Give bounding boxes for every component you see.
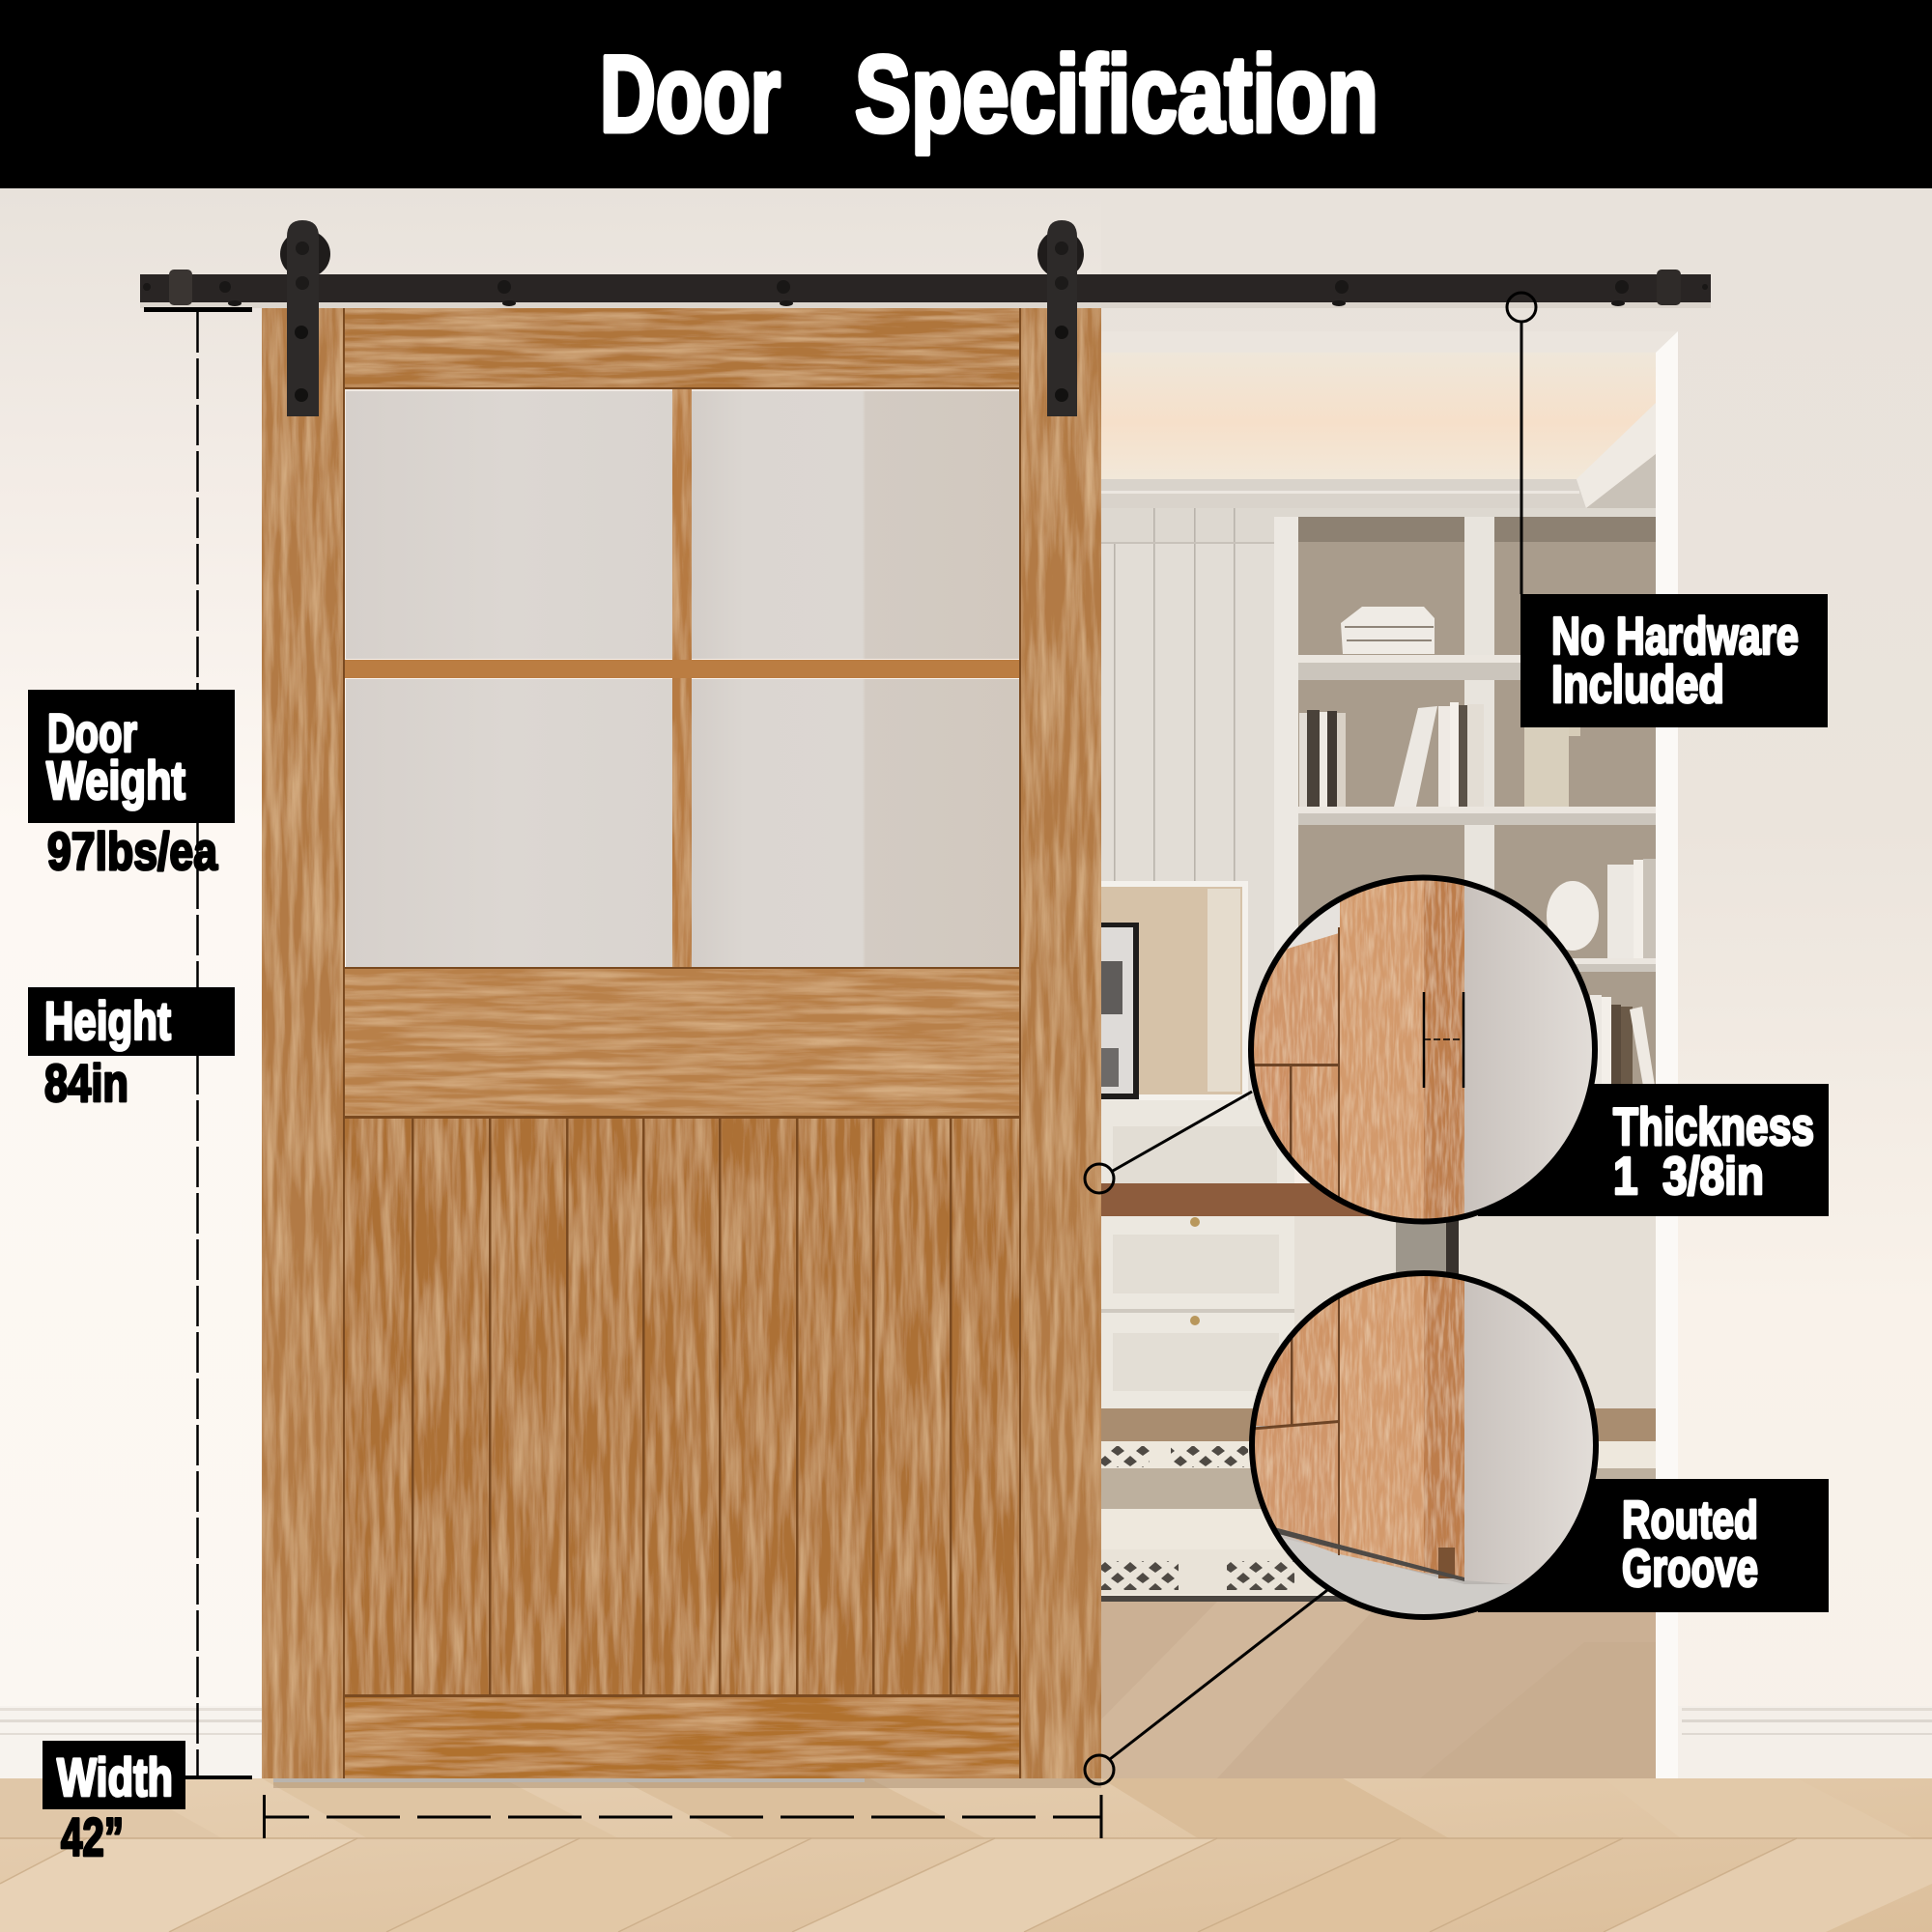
wood desk top <box>1101 1183 1391 1216</box>
callout: routed groove: Groove <box>1622 1538 1758 1598</box>
label: door weight: Weight <box>46 750 185 810</box>
sliding rail hardware <box>140 220 1711 416</box>
skirting board left <box>0 1706 262 1778</box>
left hanger strap and wheel <box>280 220 330 416</box>
callout: routed groove <box>1085 1479 1829 1784</box>
value: 42 inches: 42” <box>61 1806 124 1867</box>
books and decor on shelves <box>1299 607 1656 1116</box>
lens ring <box>1251 877 1595 1221</box>
value: 97lbs/ea: 97lbs/ea <box>47 821 217 881</box>
door opening soffit and jamb <box>1101 331 1678 1778</box>
black track rail <box>140 274 1711 302</box>
crown moulding <box>1101 403 1656 508</box>
title text: Door <box>600 34 781 155</box>
callout: no hardware included: Included <box>1551 654 1724 714</box>
value: 84in: 84in <box>44 1053 128 1113</box>
glass muntin bar <box>344 660 1020 678</box>
label: width: Width <box>57 1747 173 1807</box>
interior floor and rug <box>1101 1408 1656 1778</box>
framed art and photo <box>1101 881 1248 1100</box>
cabinet above desk <box>1101 1100 1294 1183</box>
door rails <box>344 308 1020 1778</box>
ceiling with warm cove light <box>1101 353 1656 479</box>
callout: thickness: Thickness <box>1613 1096 1814 1156</box>
callout: routed groove: Routed <box>1622 1490 1758 1549</box>
barn door <box>262 308 1101 1778</box>
drawers and cream cabinets <box>1101 1216 1656 1408</box>
title text <box>600 34 1378 155</box>
label: door weight: Door <box>47 702 137 763</box>
skirting board right <box>1678 1706 1932 1778</box>
lens ring <box>1252 1273 1596 1617</box>
plank grooves <box>343 308 1021 1778</box>
oak herringbone floor <box>0 1778 1932 1932</box>
wall left and above door <box>0 188 1101 1782</box>
height dimension line <box>144 307 252 1779</box>
callout: thickness: 1 3/8in <box>1613 1146 1764 1206</box>
magnifier: door thickness detail <box>1246 869 1604 1231</box>
label: width <box>43 1741 185 1867</box>
right hanger strap and wheel <box>1037 220 1084 416</box>
width dimension line <box>265 1795 1101 1838</box>
title text: Specification <box>855 34 1378 155</box>
rail bolts <box>143 280 1708 306</box>
label: height <box>28 987 235 1113</box>
callout: thickness <box>1085 1084 1829 1216</box>
title bar <box>0 0 1932 188</box>
wall right of opening <box>1101 188 1932 1782</box>
rail stop right <box>1657 270 1681 305</box>
door frame stiles and planks <box>262 308 1101 1778</box>
label: door weight <box>28 690 235 881</box>
magnifier: routed groove detail <box>1246 1265 1604 1633</box>
rail stop left <box>169 270 192 305</box>
callout: no hardware included <box>1507 293 1828 727</box>
glass panes <box>346 391 1020 967</box>
thickness measure marks <box>1424 992 1463 1088</box>
callout: no hardware included: No Hardware <box>1551 606 1799 666</box>
bookcase <box>1274 508 1656 1126</box>
rail shadow <box>140 302 1711 308</box>
label: height: Height <box>44 990 171 1051</box>
panelled wall behind desk <box>1101 508 1285 1107</box>
